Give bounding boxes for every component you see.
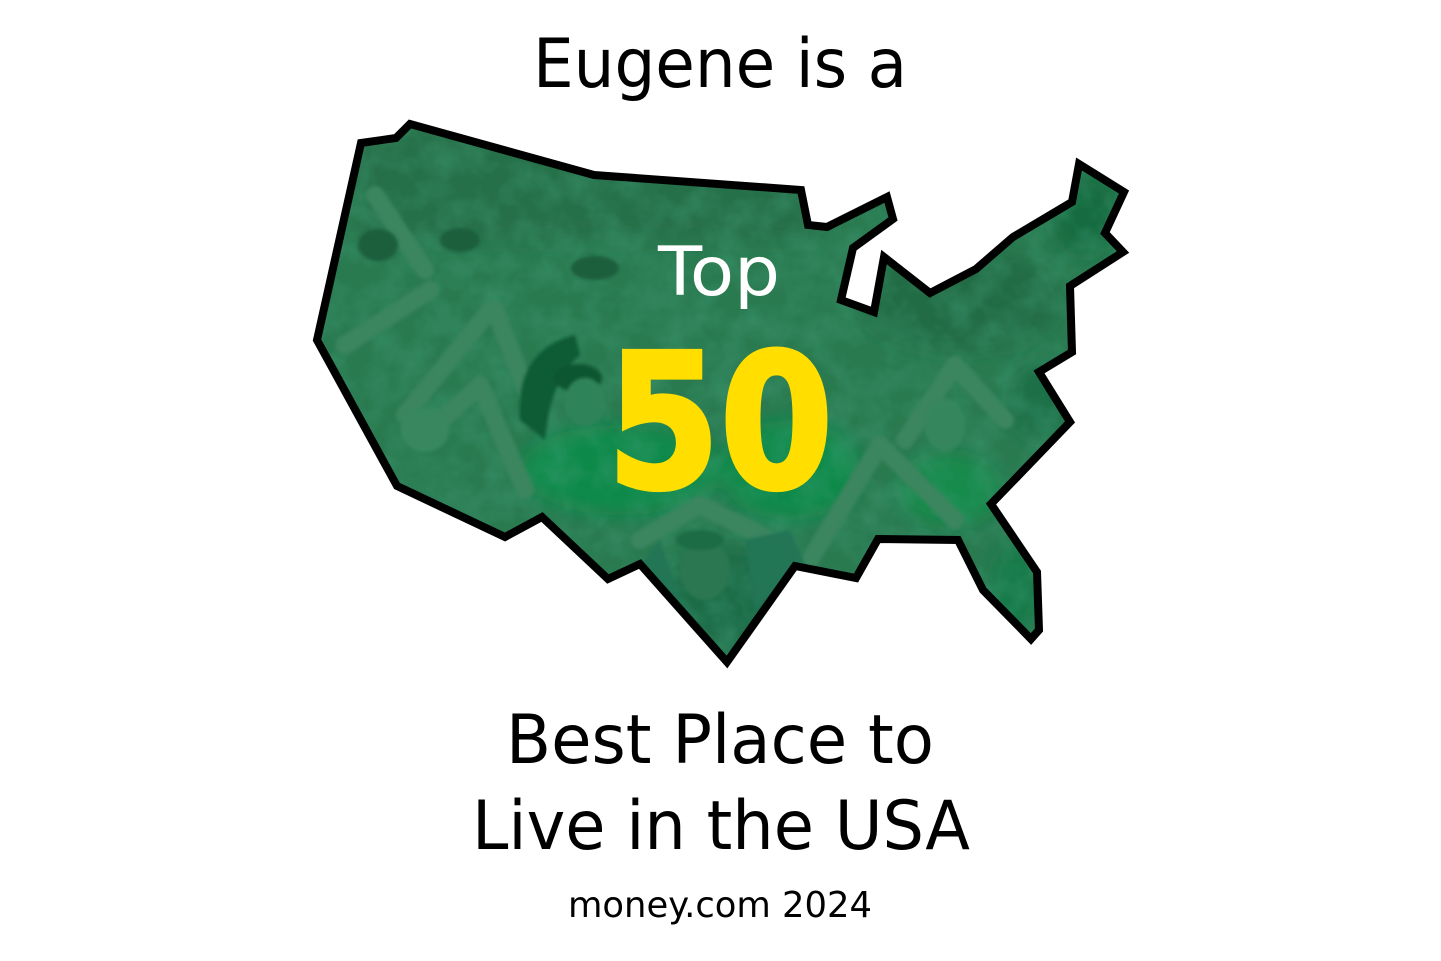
heading: Best Place to Live in the USA: Best Place to — [506, 701, 934, 780]
crowd photo texture — [321, 128, 1119, 656]
heading: Best Place to Live in the USA — [472, 701, 970, 866]
heading: Best Place to Live in the USA: Live in the USA — [472, 787, 970, 866]
title: Eugene is a: Eugene is a — [533, 25, 907, 104]
label: Top: Top — [657, 233, 780, 312]
map of the USA filled with crowd photo tint — [300, 110, 1140, 670]
map outline — [317, 124, 1124, 662]
rank number: 50: 50 — [607, 314, 833, 531]
source: money.com 2024: money.com 2024 — [568, 885, 872, 926]
mottled crowd grain — [324, 131, 1116, 655]
